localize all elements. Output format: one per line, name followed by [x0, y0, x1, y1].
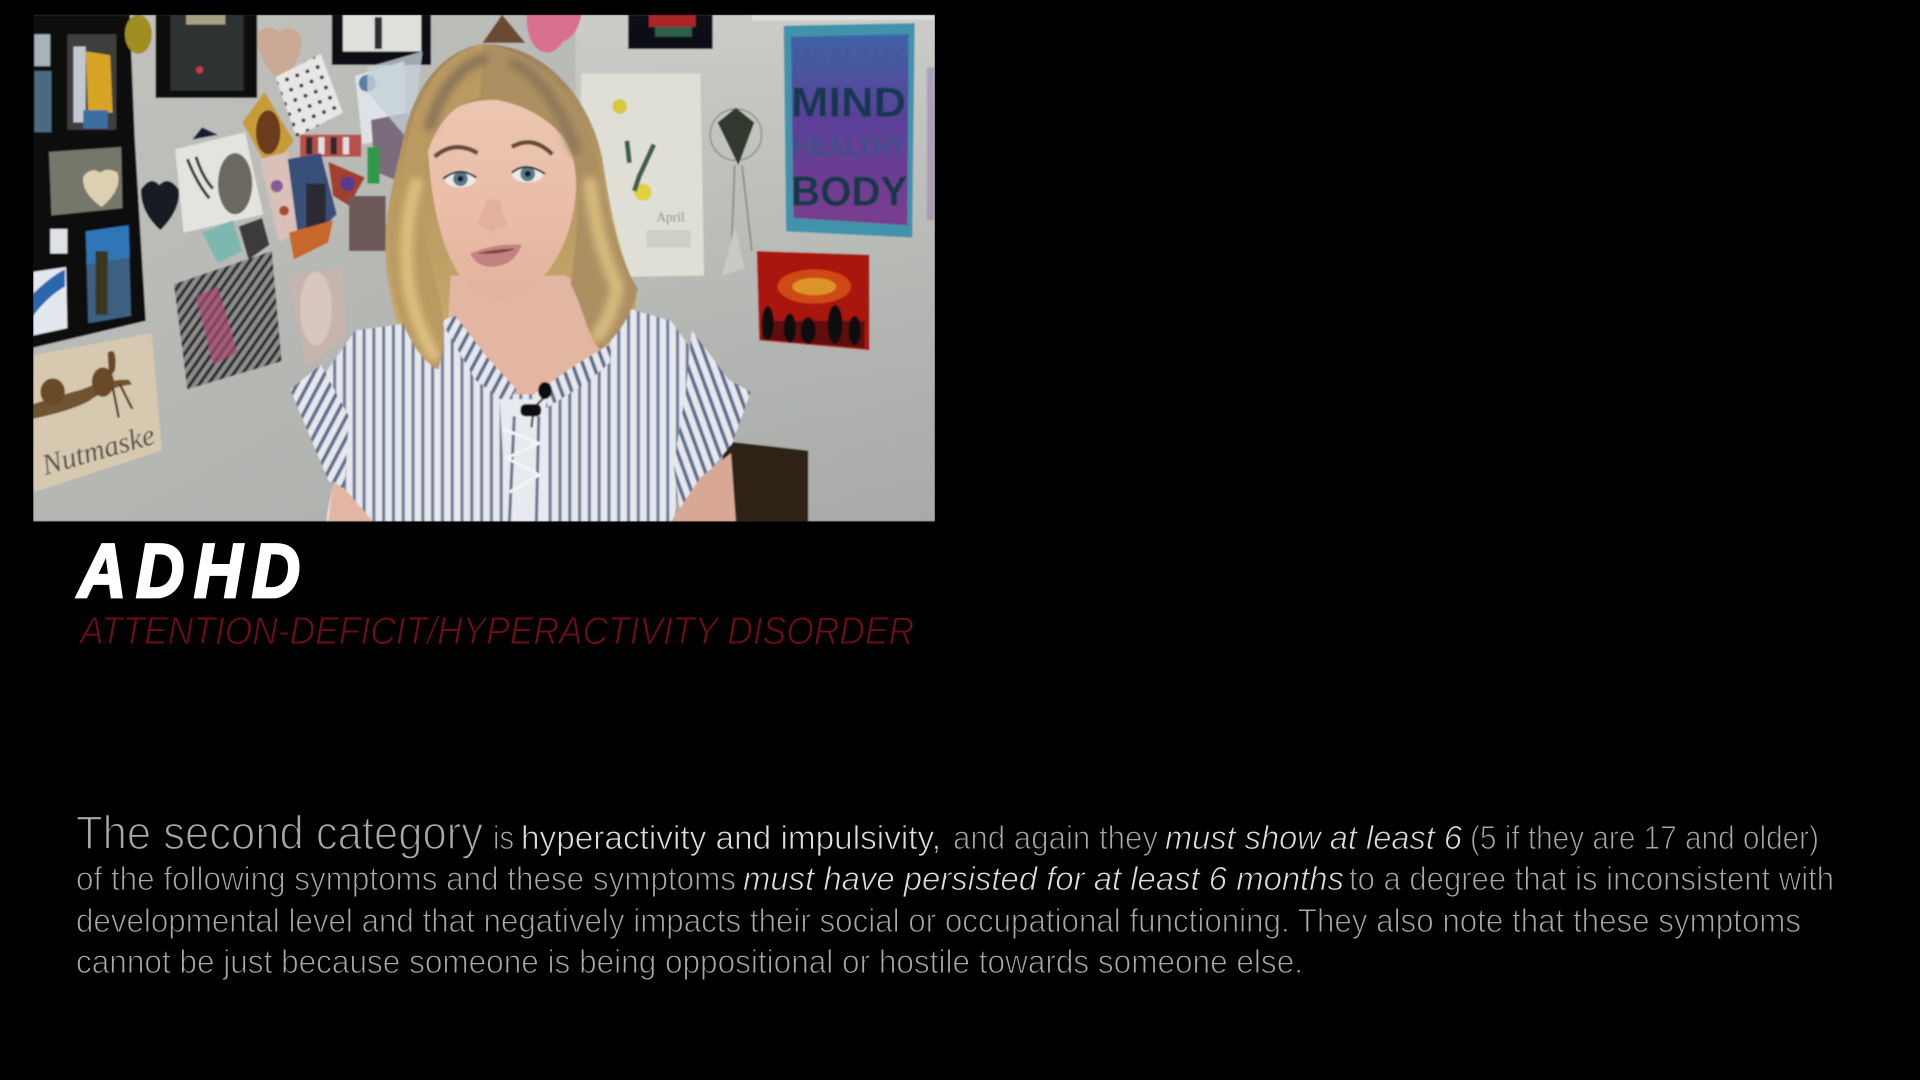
- squirrel wood plaque: Nutmaske: [37, 419, 159, 482]
- poster: healthy mind healthy body: BODY: [791, 168, 908, 215]
- line 3: developmental level and that negatively impacts their social or occupational functioning. They also note that these symptoms: [76, 903, 1801, 940]
- dreamcatcher: [710, 108, 762, 276]
- video still: presenter in front of decorated wall: [33, 15, 936, 522]
- line 1: must show at least 6: [1165, 820, 1462, 857]
- poster: healthy mind healthy body: [784, 23, 915, 238]
- eyes: [444, 170, 476, 187]
- line 2: must have persisted for at least 6 months: [743, 861, 1344, 898]
- black photo frame collage: [33, 15, 146, 348]
- face: [427, 99, 577, 276]
- presenter: [290, 44, 751, 522]
- line 2: of the following symptoms and these symptoms: [76, 861, 736, 898]
- neck and chest: [448, 276, 612, 394]
- front hair right: [480, 44, 638, 350]
- line 1: and again they: [953, 820, 1158, 857]
- subtitle: full disorder name: ATTENTION-DEFICIT/HYPERACTIVITY DISORDER: [78, 610, 914, 653]
- wall calendar: [576, 73, 704, 277]
- poster: healthy mind healthy body: HEALTHY: [793, 42, 906, 72]
- wall background: [33, 15, 936, 522]
- front hair left: [390, 44, 484, 370]
- line 2: to a degree that is inconsistent with: [1349, 861, 1834, 898]
- squirrel wood plaque: [33, 333, 162, 492]
- top wall frames: [125, 15, 934, 98]
- arms: [328, 481, 373, 522]
- eyebrows: [435, 142, 552, 157]
- collar: [441, 316, 517, 404]
- hair strands and highlights: [407, 59, 617, 355]
- wall calendar: April: [656, 210, 685, 225]
- red sunset painting: [757, 251, 869, 350]
- back hair: [384, 44, 637, 325]
- doodle notebook: [174, 251, 282, 389]
- lapel microphone: [520, 382, 552, 427]
- poster: healthy mind healthy body: HEALTHY: [793, 132, 906, 162]
- shirt body: [321, 304, 704, 522]
- heart-pattern card and photo collage: [175, 51, 422, 263]
- line 1: The second category: [76, 806, 483, 859]
- line 1: [76, 806, 1819, 859]
- mouth: [470, 244, 522, 267]
- laced placket: [500, 399, 546, 522]
- wooden cabinet: [722, 441, 808, 522]
- line 4: cannot be just because someone is being oppositional or hostile towards someone else.: [76, 944, 1303, 981]
- small black heart: [141, 181, 179, 230]
- body paragraph: [76, 806, 1834, 981]
- line 1: hyperactivity and impulsivity,: [521, 820, 941, 857]
- strip at right edge: [927, 67, 934, 220]
- pale portrait sketch: [287, 267, 347, 367]
- line 2: [76, 861, 1834, 898]
- line 1: (5 if they are 17 and older): [1470, 820, 1819, 857]
- right sleeve: [673, 331, 751, 508]
- line 1: is: [493, 820, 514, 857]
- poster: healthy mind healthy body: MIND: [791, 78, 906, 125]
- left sleeve: [290, 365, 349, 496]
- title: ADHD: ADHD: [76, 529, 310, 614]
- nose: [478, 200, 507, 231]
